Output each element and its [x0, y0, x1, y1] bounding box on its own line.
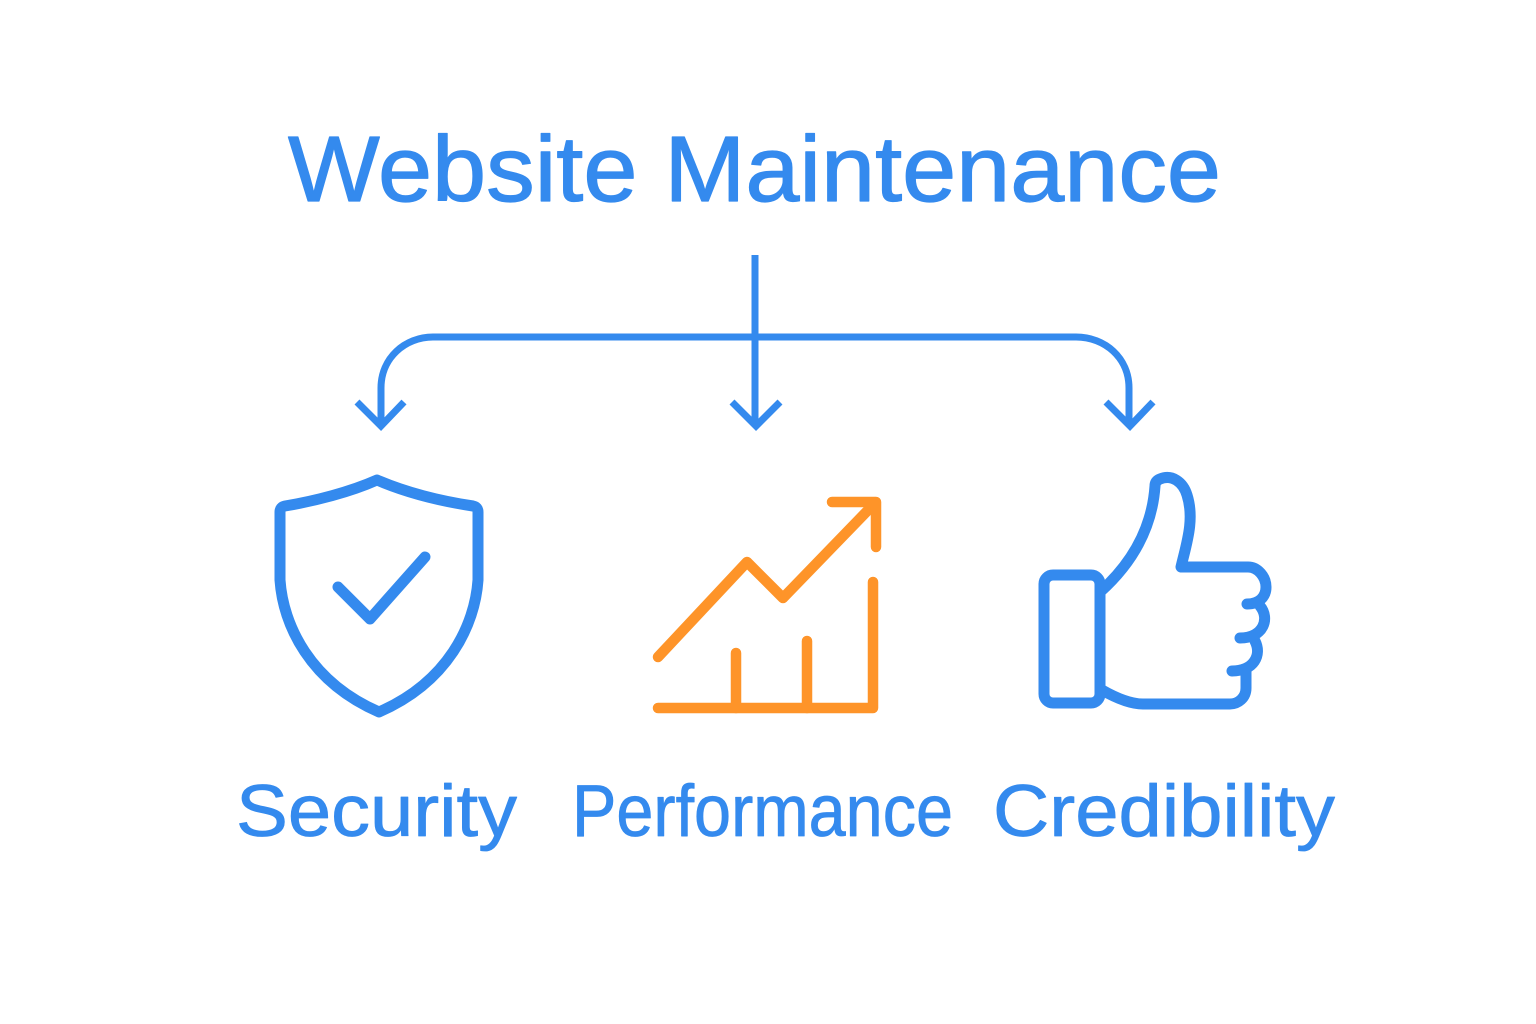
icon: performance chart [658, 502, 876, 708]
label: Performance: Performance [572, 771, 953, 852]
icon: security shield with check [280, 480, 478, 712]
title: Website Maintenance [288, 117, 1221, 221]
label: Credibility: Credibility [993, 771, 1336, 852]
label: Security: Security [236, 771, 518, 852]
icon: credibility thumbs up [1044, 477, 1266, 704]
arrow connector: three branches [357, 255, 1153, 426]
